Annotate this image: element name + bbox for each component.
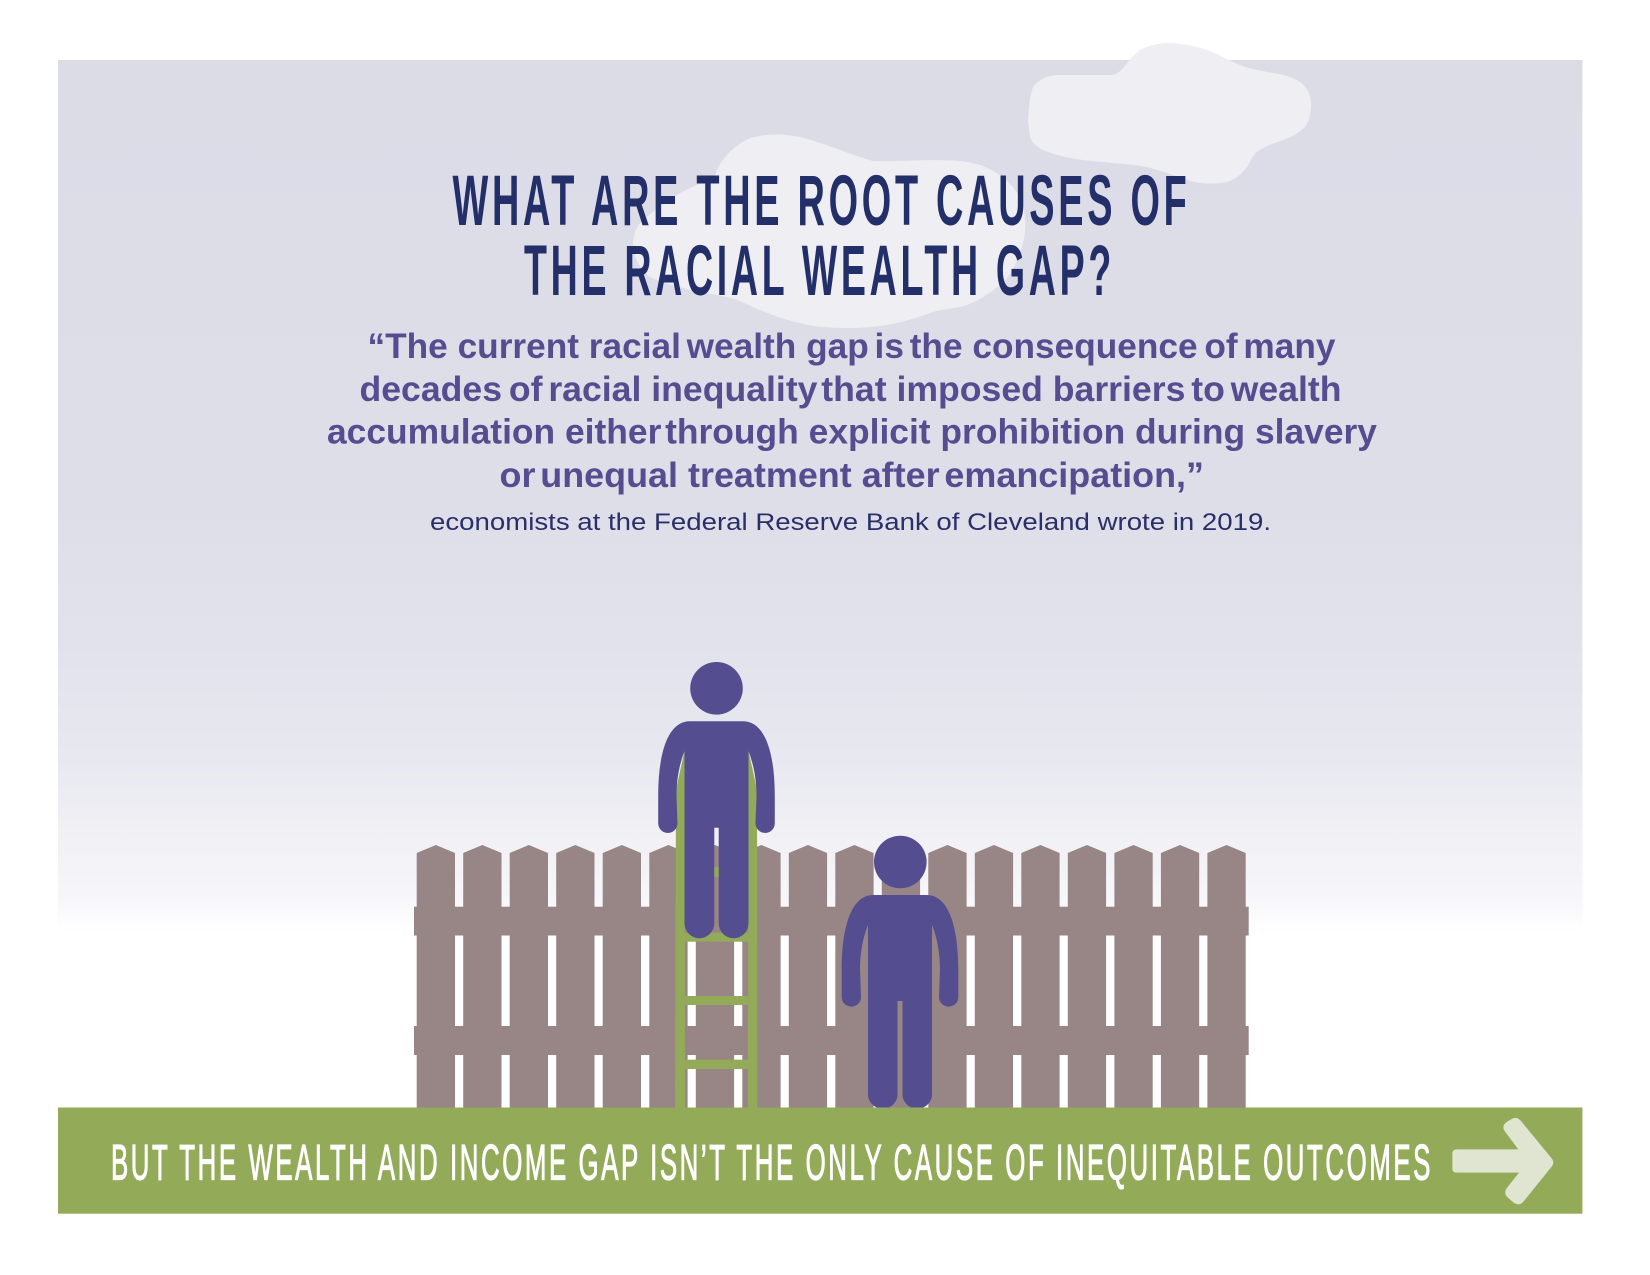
cloud: upper right: [1028, 43, 1311, 184]
banner: [58, 1108, 1582, 1214]
quote text block: “The current racial wealth gap is the consequence of many: [368, 327, 1336, 366]
figure: person standing on ground: [842, 836, 958, 1109]
quote text block: or unequal treatment after emancipation,”: [500, 456, 1204, 495]
quote text block: accumulation either through explicit prohibition during slavery: [327, 412, 1378, 452]
title: [452, 162, 1190, 311]
cloud: behind title: [633, 134, 1025, 328]
ladder: [675, 750, 757, 1108]
title: THE RACIAL WEALTH GAP?: [524, 232, 1115, 311]
fence: [414, 845, 1249, 1108]
quote text block: decades of racial inequality that imposed barriers to wealth: [360, 370, 1341, 409]
quote text block: [327, 327, 1378, 495]
quote attribution: economists at the Federal Reserve Bank of Cleveland wrote in 2019.: [430, 509, 1271, 536]
panel: gradient sky background: [58, 60, 1582, 931]
icon: arrow: [1452, 1118, 1553, 1204]
figure: person standing on ladder: [658, 662, 775, 938]
